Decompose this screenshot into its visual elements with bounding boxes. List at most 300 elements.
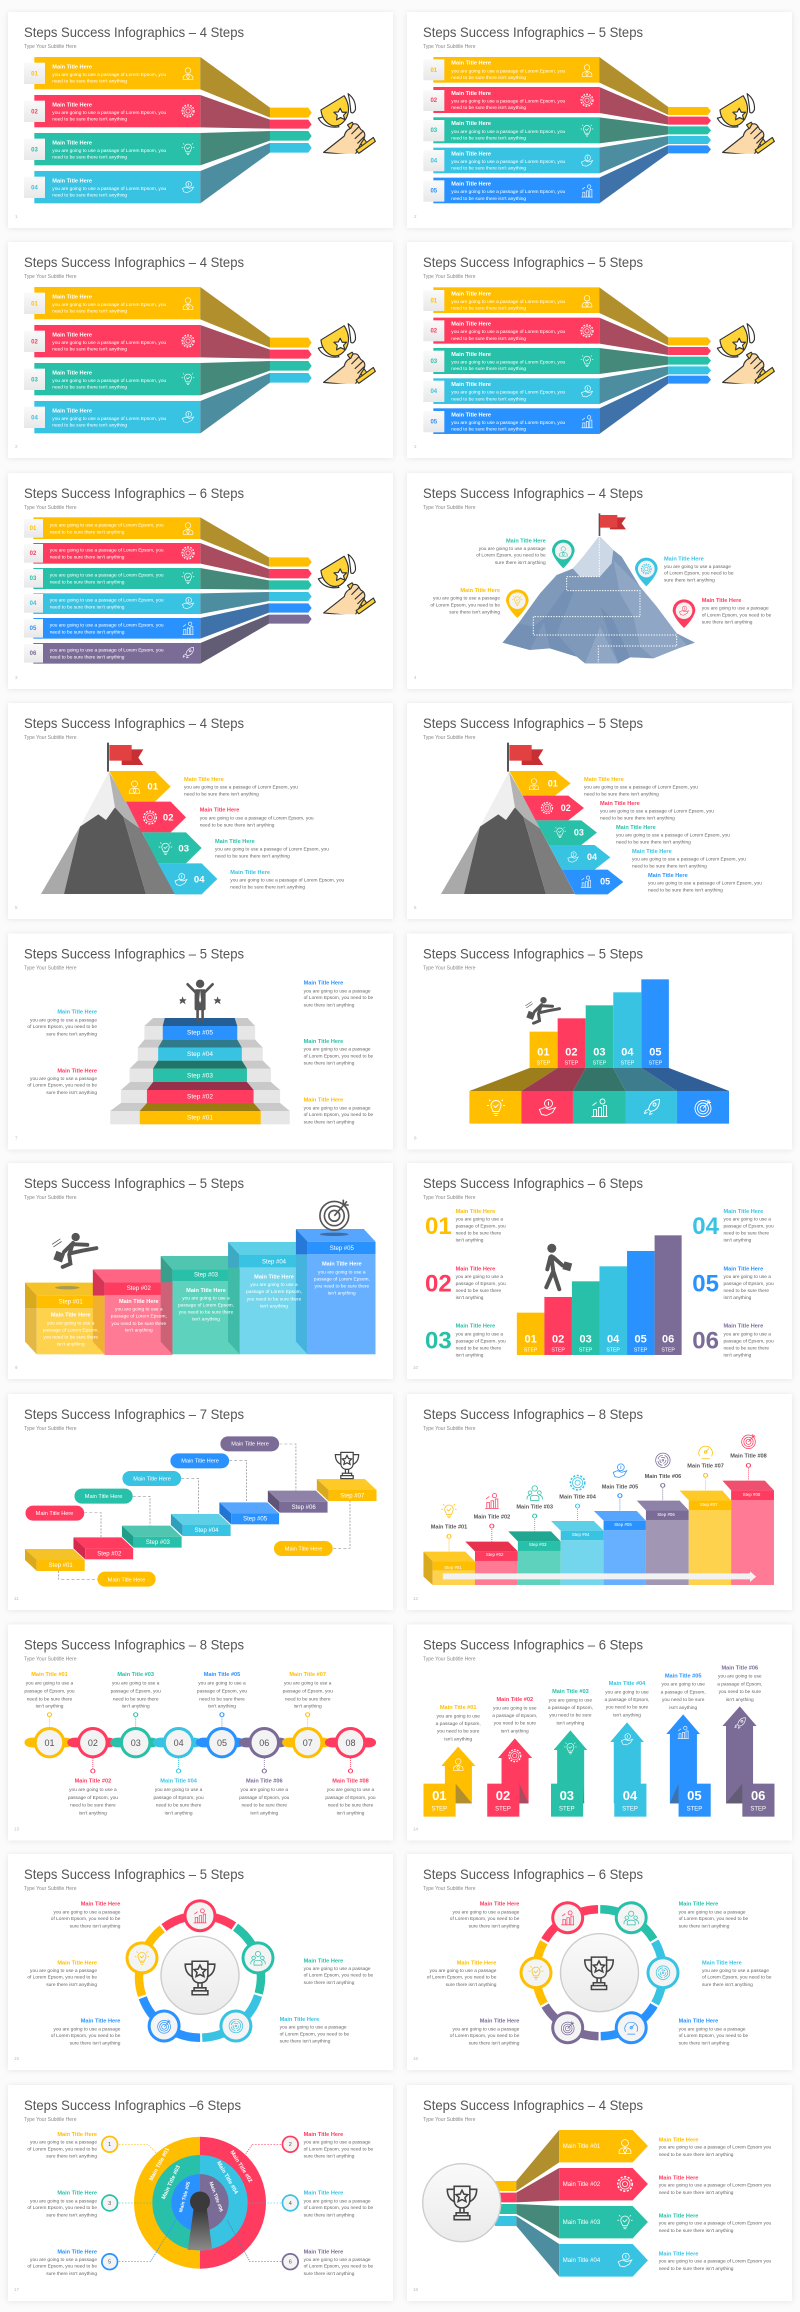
funnel bars and arrows: [423, 287, 711, 434]
step 4 text: you are going to use a passage of Lorem Epsom, you: [451, 390, 565, 396]
text: yellow: Main Title Here: [457, 1960, 496, 1966]
panel: slide 1, funnel 4 steps: [8, 12, 393, 228]
text: step 3: [215, 839, 329, 860]
page number: 6: [414, 905, 417, 910]
text 05: isn't anything: [669, 1705, 697, 1711]
title: Steps Success Infographics – 5 Steps: [24, 1866, 244, 1882]
panel: slide 8, mountain arrows 5 steps: [407, 703, 792, 919]
text: cyan: you are going to use a passage: [280, 2025, 347, 2031]
step 1 text: Main Title Here: [451, 291, 491, 297]
arrow numbers: [548, 778, 610, 886]
text 07: Main Title #07: [289, 1672, 326, 1678]
bar numbers: STEP: [621, 1060, 635, 1066]
subtitle: Type Your Subtitle Here: [24, 966, 77, 972]
node: red: [184, 1899, 216, 1932]
text: step 2: need to be sure there isn't anything: [600, 816, 675, 822]
stair labels: Step #05: [187, 1030, 213, 1037]
step icons: [182, 298, 194, 423]
box 3 text: isn't anything: [192, 1317, 220, 1323]
panel: slide 18, cycle 6 steps: [407, 1854, 792, 2070]
text 2: Main Title Here: [304, 2132, 343, 2138]
column step labels: Step #05: [614, 1522, 632, 1527]
text: green: you are going to use a passage: [679, 1909, 746, 1915]
text: green step: [476, 539, 546, 566]
page number: 2: [414, 444, 417, 449]
ring labels: [149, 2147, 253, 2213]
text 01: [24, 1672, 75, 1710]
text: green step: Main Title Here: [506, 539, 546, 545]
text: purple: Main Title Here: [480, 2019, 519, 2025]
box 4 text: Step #04: [262, 1259, 287, 1265]
node: green: [615, 1901, 648, 1934]
text 02: you need to be sure: [494, 1721, 536, 1727]
text: red: Main Title Here: [57, 1068, 97, 1074]
item 03: Main Title Here: [456, 1324, 495, 1330]
step 2 text: need to be sure there isn't anything: [451, 336, 526, 342]
text: yellow step: you are going to use a passage: [433, 596, 500, 602]
item 06: you are going to use a: [724, 1331, 771, 1337]
box 2 text: Main Title Here: [119, 1299, 159, 1305]
icon: target: [320, 1200, 349, 1230]
text: step 5: need to be sure there isn't anything: [648, 888, 723, 894]
text 4: you are going to use a passage of Lorem Epsom you: [659, 2259, 772, 2265]
text: blue: sure there isn't anything: [679, 2040, 730, 2046]
panel: slide 14, columns 8 steps: [407, 1394, 792, 1610]
step 4 text: need to be sure there isn't anything: [52, 423, 127, 429]
text: yellow step: Main Title Here: [460, 588, 500, 594]
item 01: need to be sure there: [456, 1231, 502, 1237]
text: red step: sure there isn't anything: [702, 620, 753, 626]
pill labels: Main Title Here: [285, 1547, 322, 1553]
subtitle: Type Your Subtitle Here: [423, 735, 476, 741]
node numbers: 05: [217, 1738, 227, 1748]
box 5 text: you need to be sure there: [314, 1284, 369, 1290]
text 03: you need to be sure: [549, 1713, 592, 1719]
text: red: of Lorem Epsom, you need to be: [51, 1916, 121, 1922]
text 05: passage of Epsom, you: [197, 1689, 247, 1695]
text: step 4: you are going to use a passage of Lorem Epsom, you: [230, 878, 344, 884]
step 4 text: 04: [430, 389, 438, 395]
step 3 text: need to be sure there isn't anything: [50, 579, 125, 585]
text: red: you are going to use a passage: [53, 1909, 121, 1915]
number badge 2: [282, 2136, 299, 2153]
subtitle: Type Your Subtitle Here: [423, 274, 476, 280]
text: red: of Lorem Epsom, you need to be: [450, 1916, 520, 1922]
step 5 text: 05: [430, 189, 438, 195]
step 1 text: [31, 294, 166, 315]
node: green: [242, 1941, 274, 1974]
subtitle: Type Your Subtitle Here: [24, 2117, 77, 2123]
step 5 text: Main Title Here: [451, 412, 491, 418]
stair labels: Step #02: [187, 1094, 213, 1100]
trophy hub: [423, 2164, 501, 2242]
arrow numbers: 04: [194, 875, 205, 886]
text 02: isn't anything: [79, 1810, 107, 1816]
text 4: of Lorem Epsom, you need to be: [304, 2205, 374, 2211]
text 03: you are going to use a: [112, 1681, 160, 1687]
text: yellow: [304, 1098, 374, 1125]
subtitle: Type Your Subtitle Here: [423, 1656, 476, 1662]
step 3 text: you are going to use a passage of Lorem Epsom, you: [451, 360, 565, 366]
text 01: passage of Epsom, you: [24, 1689, 75, 1695]
panel: slide 6, mountain with pins: [407, 473, 792, 689]
icon: trophy in hand: [318, 324, 375, 385]
step 3 text: [430, 352, 565, 372]
number badge 3: [101, 2194, 118, 2212]
subtitle: Type Your Subtitle Here: [24, 1656, 77, 1662]
text: step 4: need to be sure there isn't anything: [632, 864, 707, 870]
text 6: of Lorem Epsom, you need to be: [304, 2264, 374, 2270]
node: yellow: [126, 1941, 158, 1974]
box numbers: 01: [432, 1788, 447, 1803]
subtitle: Type Your Subtitle Here: [24, 1195, 77, 1201]
box 1 text: isn't anything: [57, 1342, 85, 1348]
text: purple: [450, 2019, 520, 2046]
item 02: [425, 1266, 506, 1301]
text 04: a passage of Epsom,: [604, 1697, 650, 1703]
box numbers: [431, 1788, 766, 1813]
text: red step: [702, 598, 772, 626]
step 4 text: need to be sure there isn't anything: [451, 166, 526, 172]
3D columns: [423, 1463, 774, 1585]
page number: 1: [15, 214, 18, 219]
step 3 text: need to be sure there isn't anything: [451, 136, 526, 142]
column step labels: Step #08: [743, 1492, 761, 1497]
text: red step: of Lorem Epsom, you need to be: [702, 612, 772, 618]
text 3: [659, 2213, 772, 2234]
step 2 text: [430, 322, 565, 342]
pill labels: Main Title Here: [231, 1442, 269, 1448]
box 4 text: you need to be sure there: [247, 1296, 302, 1302]
item 03: 03: [425, 1328, 452, 1355]
column step labels: Step #07: [700, 1502, 718, 1507]
pill labels: Main Title Here: [85, 1494, 122, 1500]
number badge 5: [101, 2253, 118, 2270]
step 6 text: need to be sure there isn't anything: [50, 654, 125, 660]
step 3 text: Main Title Here: [451, 121, 491, 127]
text: cyan step: you are going to use a passage: [664, 564, 731, 570]
text: blue: you are going to use a passage: [53, 2026, 121, 2032]
text: red: you are going to use a passage: [452, 1909, 520, 1915]
step 3 text: need to be sure there isn't anything: [451, 366, 526, 372]
subtitle: Type Your Subtitle Here: [24, 735, 77, 741]
text 01: need to be sure there: [27, 1696, 73, 1702]
page number: 16: [413, 2056, 419, 2061]
box 3 text: passage of Lorem Epsom,: [178, 1303, 234, 1309]
text: step 1: Main Title Here: [184, 777, 224, 783]
title: Steps Success Infographics – 4 Steps: [24, 715, 244, 731]
item 03: passage of Epsom, you: [456, 1338, 506, 1344]
step 2 text: 02: [31, 340, 38, 346]
box 5 text: you are going to use a: [318, 1269, 366, 1275]
title: Steps Success Infographics – 5 Steps: [24, 946, 244, 962]
text: blue: sure there isn't anything: [304, 1002, 355, 1008]
text: step 2: [200, 808, 314, 828]
icon: trophy in hand: [717, 324, 774, 385]
text: blue: you are going to use a passage: [679, 2026, 746, 2032]
text 03: isn't anything: [556, 1721, 585, 1727]
item 05: Main Title Here: [724, 1266, 763, 1272]
title: Steps Success Infographics – 5 Steps: [423, 946, 643, 962]
text: green: of Lorem Epsom, you need to be: [304, 1053, 374, 1059]
number badge 3: 3: [108, 2201, 111, 2207]
step 1 text: [30, 523, 164, 535]
text: step 1: need to be sure there isn't anything: [184, 792, 259, 798]
step labels: Step #06: [292, 1505, 316, 1511]
panel: slide 2, funnel 5 steps: [407, 12, 792, 228]
text 05: a passage of Epsom,: [661, 1689, 706, 1695]
text: blue: [51, 2019, 121, 2046]
title: Steps Success Infographics –6 Steps: [24, 2097, 241, 2113]
item 04: [692, 1209, 774, 1244]
text: yellow: you are going to use a passage: [304, 1105, 371, 1111]
number badge 1: [101, 2136, 118, 2153]
step 2 text: you are going to use a passage of Lorem Epsom, you: [451, 329, 565, 335]
step 3 text: 03: [30, 576, 37, 582]
text: red step: Main Title Here: [702, 598, 741, 604]
text 01: a passage of Epsom,: [436, 1721, 481, 1727]
bar numbers: STEP: [579, 1347, 593, 1353]
item 05: need to be sure there: [724, 1288, 769, 1294]
icon: trophy in hand: [318, 554, 375, 616]
step 2 text: Main Title Here: [451, 322, 491, 328]
staircase: [110, 1018, 290, 1124]
text: yellow: you are going to use a passage: [30, 1968, 97, 1974]
page number: 2: [15, 444, 18, 449]
icon: winner figure: [179, 980, 222, 1022]
text: red: Main Title Here: [81, 1902, 120, 1908]
box numbers: STEP: [622, 1807, 638, 1813]
step labels: Step #05: [243, 1517, 268, 1523]
ring arcs: [139, 1916, 261, 2038]
step 1 text: 01: [30, 526, 37, 532]
text 05: [197, 1672, 247, 1710]
text 6: you are going to use a passage: [304, 2257, 371, 2263]
node numbers: 04: [174, 1738, 184, 1748]
panel: slide 12, rising bars 6 steps: [407, 1163, 792, 1379]
step 1 text: [430, 291, 565, 312]
step 4 text: [30, 598, 164, 610]
text: blue: Main Title Here: [81, 2019, 120, 2025]
bar numbers: 04: [607, 1334, 620, 1346]
step 2 text: you are going to use a passage of Lorem Epsom, you: [50, 548, 164, 554]
stair labels: Step #03: [187, 1072, 213, 1079]
title: Steps Success Infographics – 6 Steps: [423, 1636, 643, 1652]
pin: cyan: [635, 558, 658, 586]
text 1: of Lorem Epsom, you need to be: [27, 2146, 97, 2152]
item 04: isn't anything: [724, 1238, 752, 1244]
text: step 3: you are going to use a passage of Lorem Epsom, you: [616, 833, 730, 839]
text: yellow step: [430, 588, 500, 616]
text 5: [27, 2249, 97, 2277]
text 01: Main Title #01: [440, 1705, 476, 1711]
text: step 2: you are going to use a passage of Lorem Epsom, you: [600, 809, 714, 815]
title: Steps Success Infographics – 4 Steps: [423, 2097, 643, 2113]
step 4 text: you are going to use a passage of Lorem Epsom, you: [52, 416, 166, 422]
pin: green: [552, 540, 575, 568]
node numbers: 06: [259, 1738, 269, 1748]
step 2 text: need to be sure there isn't anything: [50, 554, 125, 560]
text 02: isn't anything: [501, 1729, 529, 1735]
title: Steps Success Infographics – 5 Steps: [423, 24, 643, 40]
title: Steps Success Infographics – 7 Steps: [24, 1406, 244, 1422]
up arrows and step boxes: [423, 1706, 774, 1817]
text: cyan: sure there isn't anything: [280, 2039, 331, 2045]
text 06: [717, 1665, 762, 1703]
item 02: isn't anything: [456, 1295, 484, 1301]
step 1 text: Main Title Here: [52, 294, 92, 300]
text 06: you are going to use a: [241, 1787, 288, 1793]
text: red: [27, 1068, 97, 1096]
step 4 text: [31, 178, 166, 199]
text 07: isn't anything: [294, 1704, 322, 1710]
item 03: need to be sure there: [456, 1345, 502, 1351]
item 02: you are going to use a: [456, 1274, 503, 1280]
step 2 text: Main Title Here: [451, 91, 491, 97]
step 4 text: [31, 408, 166, 429]
box 5 text: passage of Lorem Epsom,: [314, 1276, 370, 1282]
text: blue: Main Title Here: [679, 2019, 718, 2025]
text 06: Main Title #06: [722, 1665, 758, 1671]
icon: runner: [52, 1233, 96, 1267]
text: green: Main Title Here: [679, 1902, 718, 1908]
text: cyan: sure there isn't anything: [46, 1031, 97, 1037]
text: green: [304, 1958, 374, 1986]
step 3 text: you are going to use a passage of Lorem Epsom, you: [451, 129, 565, 135]
ring labels: Main Title #02: [228, 2150, 253, 2184]
text 03: Main Title #03: [552, 1689, 589, 1695]
bar numbers: [537, 1047, 663, 1066]
step labels: Step #03: [146, 1540, 171, 1546]
page number: 15: [14, 2056, 20, 2061]
text: step 2: [600, 801, 714, 822]
text: yellow: of Lorem Epsom, you need to be: [427, 1975, 497, 1981]
step 2 text: 02: [430, 329, 438, 335]
text: yellow: sure there isn't anything: [304, 1119, 355, 1125]
arrow numbers: 05: [600, 876, 610, 886]
step 2 text: you are going to use a passage of Lorem Epsom, you: [451, 98, 565, 104]
page number: 11: [14, 1596, 19, 1601]
text 4: [659, 2251, 772, 2272]
bar numbers: STEP: [565, 1060, 579, 1066]
step 4 text: you are going to use a passage of Lorem Epsom, you: [451, 159, 565, 165]
step 2 text: [430, 91, 565, 111]
step 1 text: Main Title Here: [52, 64, 92, 70]
step labels: Step #02: [97, 1551, 122, 1557]
center hub with trophy: [161, 1936, 239, 2014]
text: cyan: of Lorem Epsom, you need to be: [702, 1975, 772, 1981]
3D boxes: [25, 1229, 376, 1355]
text: red: Main Title Here: [480, 1902, 519, 1908]
funnel bars and arrows: [24, 57, 312, 203]
subtitle: Type Your Subtitle Here: [423, 1195, 476, 1201]
box 2 text: passage of Lorem Epsom,: [111, 1314, 167, 1320]
text 04: need to be sure there: [156, 1803, 202, 1809]
item 02: need to be sure there: [456, 1288, 502, 1294]
text 4: Main Title Here: [304, 2191, 343, 2197]
text 06: you need to be sure: [719, 1689, 761, 1695]
text: cyan: Main Title Here: [280, 2017, 319, 2023]
step 5 text: you are going to use a passage of Lorem Epsom, you: [451, 420, 565, 426]
step 5 text: you are going to use a passage of Lorem Epsom, you: [451, 189, 565, 195]
text: yellow: sure there isn't anything: [446, 1982, 497, 1988]
stair labels: Step #04: [187, 1051, 213, 1058]
text: step 5: Main Title Here: [648, 873, 688, 879]
step 4 text: you are going to use a passage of Lorem Epsom, you: [52, 186, 166, 192]
node: red: [551, 1901, 584, 1934]
box 3 text: you are going to use a: [182, 1296, 230, 1302]
text: step 3: Main Title Here: [215, 839, 255, 845]
text 02: you are going to use a: [69, 1787, 117, 1793]
pill labels: Main Title Here: [181, 1459, 219, 1465]
text: cyan: of Lorem Epsom, you need to be: [27, 1024, 97, 1030]
item 05: you are going to use a: [724, 1274, 771, 1280]
ring labels: Main Title #03: [161, 2165, 182, 2200]
text: yellow: sure there isn't anything: [46, 1982, 97, 1988]
bar numbers: STEP: [649, 1060, 663, 1066]
number badge 5: 5: [108, 2260, 111, 2266]
text 1: you are going to use a passage: [30, 2140, 97, 2146]
keyhole: [188, 2192, 212, 2250]
node: blue: [615, 2011, 648, 2044]
step 2 text: need to be sure there isn't anything: [451, 105, 526, 111]
box 1 text: [43, 1300, 99, 1348]
step 5 text: need to be sure there isn't anything: [50, 629, 125, 635]
box 4 text: isn't anything: [260, 1303, 288, 1309]
text 05: isn't anything: [208, 1704, 236, 1710]
text 6: [304, 2249, 374, 2277]
title: Steps Success Infographics – 5 Steps: [423, 254, 643, 270]
text 1: [659, 2137, 772, 2158]
text 03: isn't anything: [122, 1704, 150, 1710]
text: blue: of Lorem Epsom, you need to be: [51, 2033, 121, 2039]
step 2 text: Main Title Here: [52, 102, 92, 108]
text: cyan: [27, 1010, 97, 1037]
box 2 text: Step #02: [127, 1286, 151, 1292]
text: yellow step: sure there isn't anything: [449, 610, 500, 616]
text 02: you are going to use: [493, 1705, 537, 1711]
text 01: [436, 1705, 481, 1743]
step 4 text: 04: [31, 416, 38, 422]
text: cyan: Main Title Here: [702, 1960, 742, 1966]
marker titles: Main Title #06: [645, 1474, 681, 1480]
arrow labels: Main Title #03: [563, 2220, 601, 2226]
text 01: isn't anything: [444, 1737, 472, 1743]
text 06: need to be sure there: [241, 1803, 287, 1809]
text: yellow step: of Lorem Epsom, you need to be: [430, 602, 500, 608]
text 01: you are going to use a: [26, 1681, 74, 1687]
subtitle: Type Your Subtitle Here: [423, 1886, 476, 1892]
text 06: [239, 1779, 290, 1816]
text 02: Main Title #02: [75, 1779, 111, 1785]
text 01: you need to be sure: [437, 1729, 480, 1735]
subtitle: Type Your Subtitle Here: [423, 44, 476, 50]
step 1 text: need to be sure there isn't anything: [451, 306, 526, 312]
funnel bars and arrows: [423, 57, 711, 203]
box 3 text: Step #03: [194, 1273, 219, 1279]
text 2: need to be sure there isn't anything: [659, 2190, 734, 2196]
step 3 text: need to be sure there isn't anything: [52, 155, 127, 161]
text 4: need to be sure there isn't anything: [659, 2266, 734, 2272]
step 5 text: [430, 412, 565, 433]
panel: slide 5, funnel 6 steps: [8, 473, 393, 689]
item 01: you are going to use a: [456, 1217, 503, 1223]
pill labels: Main Title Here: [108, 1578, 145, 1584]
text 04: Main Title #04: [160, 1779, 198, 1785]
page number: 10: [413, 1365, 419, 1370]
box 4 text: you are going to use a: [250, 1282, 298, 1288]
panel: slide 11, 3D boxes: [8, 1163, 393, 1379]
